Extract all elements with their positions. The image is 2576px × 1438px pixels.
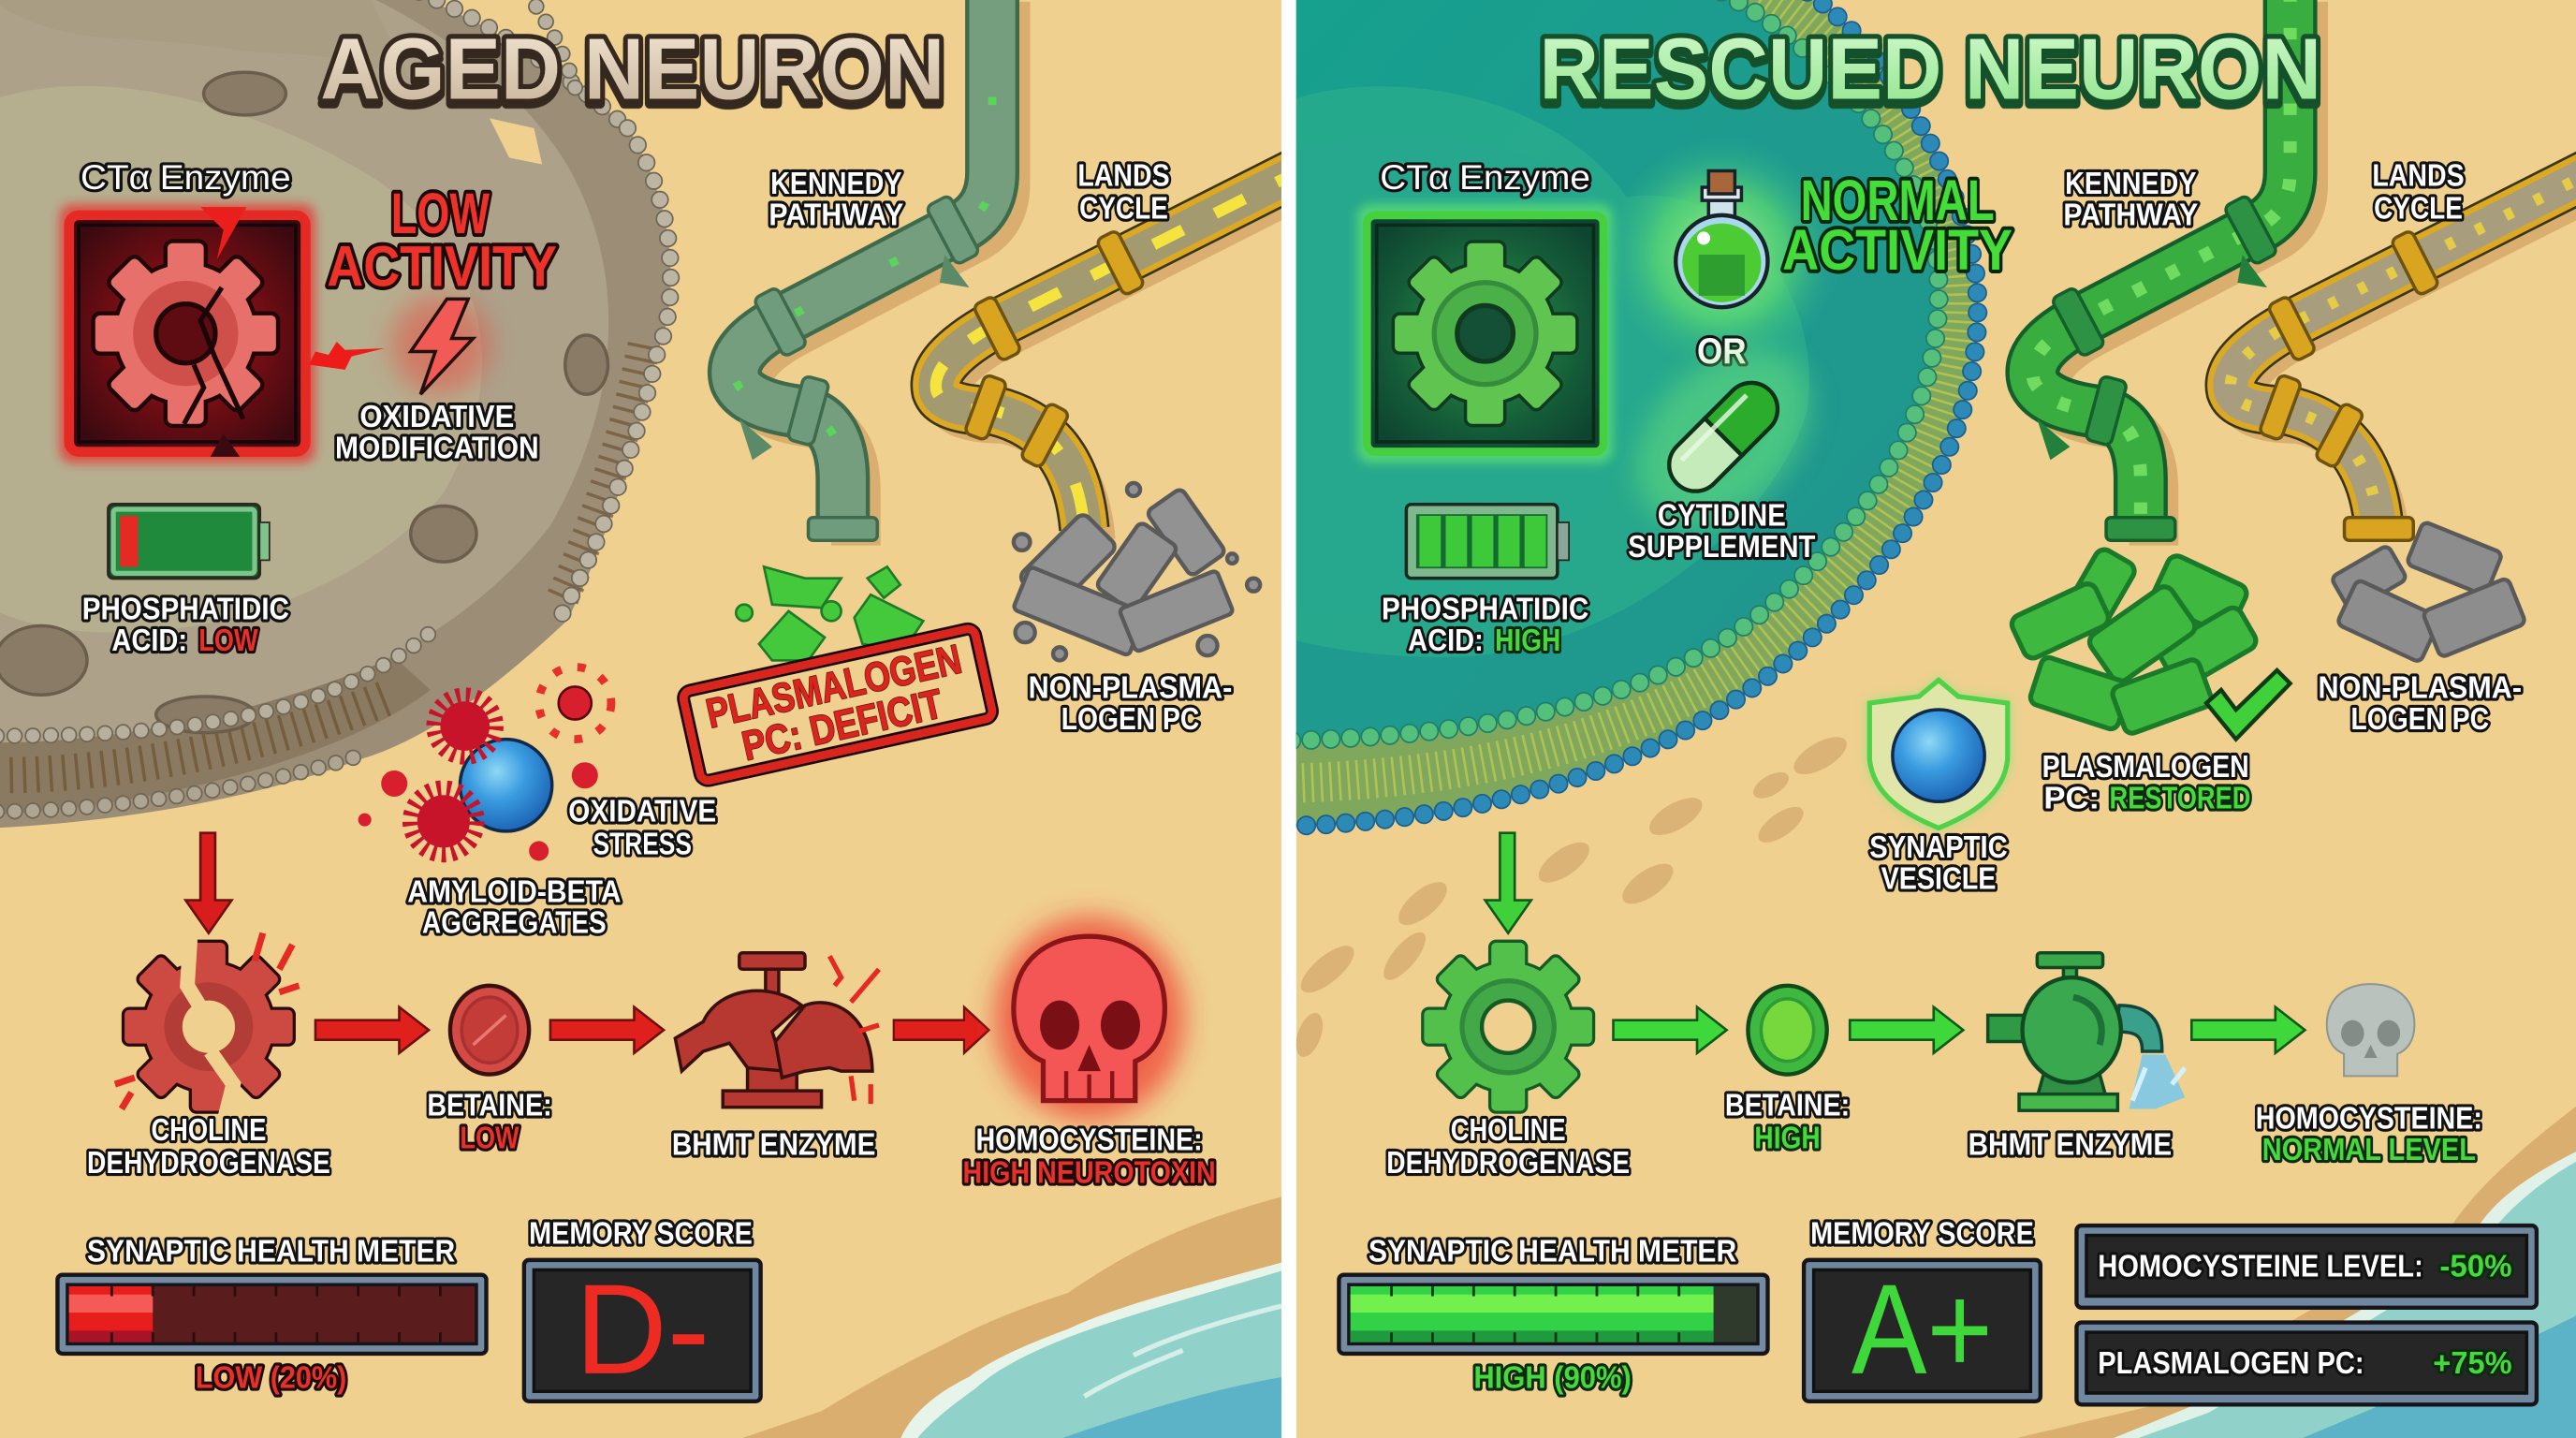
icon: glowing red skull (994, 917, 1184, 1121)
phosphatidic acid high label: PHOSPHATIDIC (1382, 593, 1588, 627)
synaptic health meter: high: SYNAPTIC HEALTH METER (1368, 1235, 1736, 1269)
memory score: d minus: MEMORY SCORE (529, 1216, 753, 1251)
oxidative modification label: OXIDATIVE (359, 400, 514, 434)
icon: faded grey skull (2327, 984, 2414, 1076)
choline dehydrogenase label: CHOLINE (151, 1113, 266, 1148)
amyloid-beta label (407, 874, 621, 941)
non-plasmalogen pc label (1029, 671, 1232, 737)
arrow: red down (185, 833, 231, 933)
arrow: red to bhmt (550, 1007, 664, 1053)
kennedy pathway label (2063, 167, 2198, 232)
panel: rescued neuron (1281, 0, 2576, 1438)
lands cycle label: CYCLE (1079, 191, 1168, 226)
icon: plasmalogen green shards (736, 566, 923, 660)
memory score: d minus (524, 1216, 761, 1401)
synaptic health meter: high: HIGH (90%) (1473, 1361, 1632, 1396)
icon: non-plasmalogen pc blocks (2331, 521, 2526, 663)
betaine low label (427, 1088, 552, 1156)
synaptic health meter: low (57, 1235, 487, 1396)
phosphatidic acid high label: HIGH (1495, 624, 1560, 658)
neuron cell body: healthy (1281, 0, 1978, 827)
kennedy pathway label: KENNEDY (2065, 167, 2197, 201)
lands cycle label (1077, 158, 1170, 226)
CTa enzyme label: CTα Enzyme (80, 158, 291, 197)
betaine low label: LOW (460, 1122, 520, 1156)
betaine high label: BETAINE: (1725, 1088, 1850, 1123)
plasmalogen pc deficit stamp: PLASMALOGEN (702, 637, 965, 737)
icon: betaine coin high (1748, 986, 1827, 1075)
bhmt enzyme label: BHMT ENZYME (672, 1128, 875, 1163)
synaptic health meter: low: SYNAPTIC HEALTH METER (87, 1235, 455, 1269)
arrow: green down (1486, 833, 1531, 933)
arrow: green to bhmt (1850, 1007, 1963, 1053)
icon: cytidine pill (1603, 316, 1844, 558)
choline dehydrogenase label: DEHYDROGENASE (1386, 1146, 1630, 1181)
icon: working bhmt pump (1988, 953, 2185, 1110)
oxidative modification label (335, 400, 539, 466)
choline dehydrogenase label (87, 1113, 330, 1181)
plasmalogen pc restored label: PLASMALOGEN (2042, 750, 2249, 785)
stat box: homocysteine level: -50% (2439, 1249, 2512, 1284)
arrow: green to skull (2191, 1007, 2305, 1053)
non-plasmalogen pc label: LOGEN PC (2351, 702, 2489, 737)
icon: restored plasmalogen stack (2009, 546, 2260, 736)
choline dehydrogenase label: DEHYDROGENASE (87, 1146, 330, 1181)
phosphatidic acid high label (1382, 593, 1588, 658)
homocysteine high label: HIGH NEUROTOXIN (962, 1155, 1216, 1190)
bhmt enzyme label: BHMT ENZYME (1969, 1128, 2172, 1163)
non-plasmalogen pc label: NON-PLASMA- (2318, 671, 2522, 706)
stat box: homocysteine level (2076, 1225, 2537, 1308)
homocysteine normal label: HOMOCYSTEINE: (2256, 1102, 2482, 1136)
kennedy pathway label: PATHWAY (2063, 198, 2198, 232)
stat box: plasmalogen pc: PLASMALOGEN PC: (2098, 1346, 2364, 1381)
synaptic health meter: low: LOW (20%) (196, 1361, 346, 1396)
stat box: plasmalogen pc: +75% (2433, 1346, 2512, 1381)
non-plasmalogen pc label: NON-PLASMA- (1029, 671, 1232, 706)
lands pipe: steady flow (2231, 168, 2576, 540)
plasmalogen pc restored label (2042, 750, 2250, 815)
icon: broken choline dehydrogenase gear (115, 933, 299, 1123)
amyloid-beta label: AMYLOID-BETA (407, 874, 621, 909)
oxidative stress label: STRESS (593, 827, 692, 861)
kennedy pathway label: PATHWAY (768, 198, 903, 232)
shoreline and sea (739, 1196, 1284, 1438)
homocysteine normal label (2256, 1102, 2482, 1167)
lands cycle label (2372, 158, 2465, 226)
lands cycle label: LANDS (1077, 158, 1170, 193)
gutter (1281, 0, 1296, 1438)
icon: betaine coin low (450, 986, 529, 1075)
kennedy pathway label: KENNEDY (770, 167, 902, 201)
phosphatidic acid low label: ACID: (111, 624, 187, 658)
neuron cell body: damaged (0, 0, 671, 828)
phosphatidic acid low label: LOW (198, 624, 258, 658)
memory score: d minus: D- (575, 1258, 710, 1401)
cytidine supplement label (1628, 499, 1815, 565)
icon: damaged CTa enzyme gear box (59, 204, 315, 463)
panel: aged neuron (0, 0, 1316, 1438)
plasmalogen pc deficit stamp: PC: DEFICIT (738, 681, 947, 770)
icon: low battery (109, 505, 270, 579)
icon: healthy choline dehydrogenase gear (1424, 943, 1592, 1110)
or label: OR (1697, 331, 1747, 372)
homocysteine high label: HOMOCYSTEINE: (976, 1123, 1203, 1157)
icon: checkmark (2206, 670, 2291, 740)
stat box: homocysteine level: HOMOCYSTEINE LEVEL: (2098, 1249, 2423, 1284)
synaptic health meter: high (1339, 1235, 1767, 1396)
homocysteine normal label: NORMAL LEVEL (2262, 1133, 2476, 1167)
normal activity label: NORMAL (1801, 169, 1995, 233)
synaptic vesicle label (1869, 830, 2008, 896)
icon: amyloid-beta aggregates attacking vesicle (359, 667, 611, 860)
memory score: a plus (1804, 1216, 2041, 1401)
non-plasmalogen pc label: LOGEN PC (1061, 702, 1199, 737)
CTa enzyme label: CTα Enzyme (1380, 158, 1590, 197)
stat box: plasmalogen pc (2076, 1323, 2537, 1404)
betaine high label: HIGH (1754, 1122, 1821, 1156)
lands cycle label: CYCLE (2374, 191, 2463, 226)
cytidine supplement label: CYTIDINE (1658, 499, 1786, 534)
non-plasmalogen pc label (2318, 671, 2522, 737)
arrow: red to betaine (315, 1007, 429, 1053)
plasmalogen pc restored label: PC: (2043, 781, 2100, 815)
betaine low label: BETAINE: (427, 1088, 552, 1123)
betaine high label (1725, 1088, 1850, 1156)
plasmalogen pc deficit stamp (682, 627, 994, 782)
icon: potion flask (1603, 137, 1840, 373)
title: AGED NEURON (320, 20, 944, 117)
arrow: red to skull (894, 1007, 989, 1053)
lands cycle label: LANDS (2372, 158, 2465, 193)
normal activity label (1782, 169, 2012, 283)
amyloid-beta label: AGGREGATES (422, 906, 607, 941)
icon: full battery (1406, 505, 1569, 579)
arrow: green to betaine (1614, 1007, 1727, 1053)
icon: broken bhmt pump (675, 953, 879, 1108)
memory score: a plus: MEMORY SCORE (1810, 1216, 2034, 1251)
oxidative stress label (568, 794, 716, 861)
title: RESCUED NEURON (1540, 20, 2321, 117)
icon: crumbled non-plasmalogen pc (1013, 483, 1260, 660)
kennedy pipe: dim flow (735, 0, 1005, 546)
phosphatidic acid high label: ACID: (1408, 624, 1484, 658)
icon: lightning bolt oxidative damage (309, 296, 490, 394)
normal activity label: ACTIVITY (1782, 218, 2012, 283)
cytidine supplement label: SUPPLEMENT (1628, 530, 1815, 565)
low activity label (325, 189, 560, 290)
oxidative modification label: MODIFICATION (335, 432, 539, 466)
oxidative stress label: OXIDATIVE (568, 794, 716, 829)
phosphatidic acid low label (82, 593, 289, 658)
synaptic vesicle label: SYNAPTIC (1869, 830, 2008, 865)
icon: healthy CTa enzyme gear box (1357, 204, 1614, 463)
shoreline and sea (2012, 1104, 2576, 1438)
homocysteine high label (962, 1123, 1216, 1190)
synaptic vesicle label: VESICLE (1881, 861, 1996, 896)
kennedy pipe: strong flow (2032, 0, 2304, 546)
choline dehydrogenase label (1386, 1113, 1630, 1181)
choline dehydrogenase label: CHOLINE (1451, 1113, 1566, 1148)
low activity label: LOW (391, 182, 490, 246)
memory score: a plus: A+ (1852, 1258, 1993, 1401)
lands pipe: yellow flow (936, 168, 1316, 540)
footprints (1291, 729, 1852, 1061)
phosphatidic acid low label: PHOSPHATIDIC (82, 593, 289, 627)
low activity label: ACTIVITY (327, 234, 557, 299)
icon: shielded synaptic vesicle (1866, 677, 2011, 831)
kennedy pathway label (768, 167, 903, 232)
plasmalogen pc restored label: RESTORED (2110, 781, 2250, 815)
